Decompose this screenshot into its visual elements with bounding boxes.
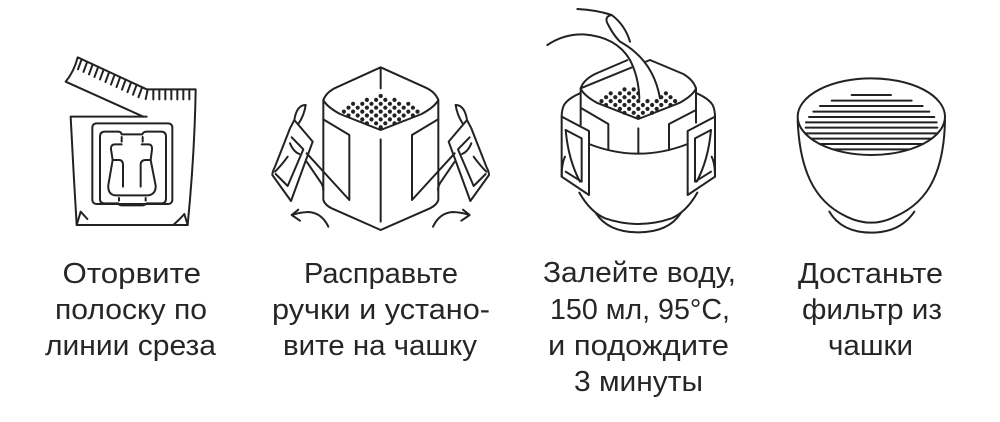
caption: step 1	[45, 258, 216, 362]
icon: perforated filter dots	[602, 89, 675, 117]
caption: step 1: Оторвите	[62, 258, 201, 290]
caption: step 1: полоску по	[55, 294, 207, 326]
icon: cup with coffee seen from above	[798, 78, 945, 233]
caption: step 3: 150 мл, 95°С,	[550, 294, 730, 326]
caption: step 2	[272, 258, 490, 362]
panel: step 3 pour water	[543, 9, 736, 398]
caption: step 4: Достаньте	[798, 258, 943, 290]
icon: sachet with torn strip	[66, 57, 196, 225]
icon: cup body with filter bag	[562, 60, 715, 232]
caption: step 2: ручки и устано-	[272, 294, 490, 326]
icon: perforated filter dots	[344, 96, 418, 127]
panel: step 4 remove filter	[798, 78, 945, 362]
caption: step 3: и подождите	[548, 330, 729, 362]
icon: water stream and paper spout	[547, 9, 660, 98]
caption: step 2: Расправьте	[304, 258, 458, 290]
caption: step 3: Залейте воду,	[543, 257, 736, 289]
caption: step 4: фильтр из	[802, 294, 942, 326]
caption: step 3: 3 минуты	[574, 366, 703, 398]
caption: step 2: вите на чашку	[283, 330, 478, 362]
panel: step 2 unfold the handles	[272, 67, 490, 362]
caption: step 4	[798, 258, 943, 362]
caption: step 4: чашки	[828, 330, 913, 362]
caption: step 3	[543, 257, 736, 398]
icon: filter bag with unfolded handles	[272, 67, 489, 230]
panel: step 1 tear the strip	[45, 57, 216, 362]
caption: step 1: линии среза	[45, 330, 216, 362]
